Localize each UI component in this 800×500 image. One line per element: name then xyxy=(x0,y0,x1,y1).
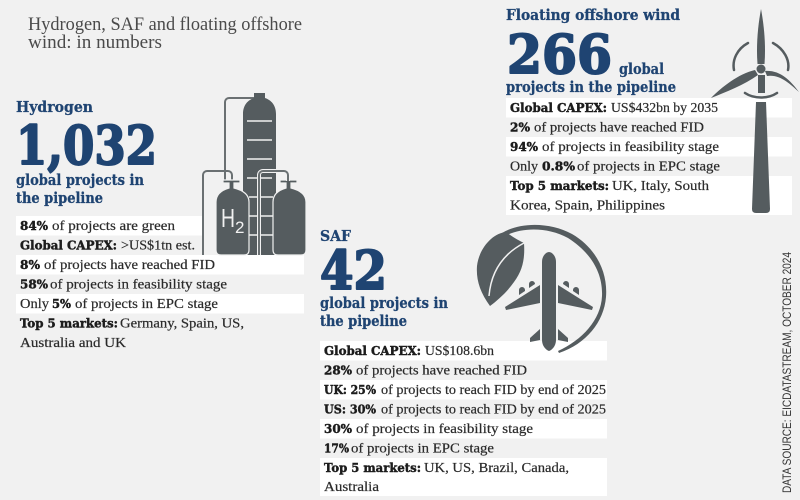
hydrogen subheading: the pipeline xyxy=(16,189,103,207)
SAF stat rows: UK: 25% xyxy=(324,383,377,397)
SAF stat rows: 28% xyxy=(324,364,353,378)
hydrogen stat rows: Global CAPEX: xyxy=(20,238,117,252)
hydrogen stat rows: 84% xyxy=(20,219,49,233)
wind big number: 266 xyxy=(507,24,612,86)
hydrogen stat rows: 5% xyxy=(52,297,72,311)
SAF stat rows: of projects in EPC stage xyxy=(351,440,494,456)
SAF subheading: global projects in xyxy=(320,294,448,312)
wind stat rows: 0.8% xyxy=(542,160,576,174)
hydrogen subheading xyxy=(16,171,144,207)
panel: hydrogen xyxy=(16,93,306,350)
hydrogen stat rows: Only xyxy=(20,296,49,311)
hydrogen stat rows: >US$1tn est. xyxy=(121,238,195,252)
hydrogen stat rows: of projects in EPC stage xyxy=(75,296,218,311)
SAF subheading: the pipeline xyxy=(320,312,407,330)
hydrogen big number: 1,032 xyxy=(16,115,157,177)
wind stat rows: UK, Italy, South xyxy=(612,178,709,193)
SAF subheading xyxy=(320,294,448,330)
wind subheading: projects in the pipeline xyxy=(506,78,676,96)
wind stat rows: US$432bn by 2035 xyxy=(611,100,718,115)
hydrogen stat rows: of projects are green xyxy=(52,218,175,233)
hydrogen subheading: global projects in xyxy=(16,171,144,189)
SAF stat rows: UK, US, Brazil, Canada, xyxy=(424,460,569,475)
SAF stat rows xyxy=(320,341,607,496)
wind subheading xyxy=(506,60,676,96)
wind stat rows: Global CAPEX: xyxy=(510,101,607,115)
SAF stat rows: 30% xyxy=(324,422,353,436)
wind stat rows: 94% xyxy=(510,140,539,154)
wind heading: Floating offshore wind xyxy=(506,6,680,24)
panel: floating offshore wind xyxy=(506,6,799,215)
SAF stat rows: of projects in feasibility stage xyxy=(356,421,533,436)
wind stat rows: Only xyxy=(510,158,538,174)
wind stat rows xyxy=(506,98,792,215)
hydrogen stat rows: 8% xyxy=(20,258,41,272)
wind stat rows: of projects in feasibility stage xyxy=(542,139,719,154)
wind stat rows: Korea, Spain, Philippines xyxy=(510,198,665,212)
SAF stat rows: US: 30% xyxy=(324,402,377,416)
icon: hydrogen plant: 2 xyxy=(235,218,244,237)
SAF stat rows: of projects to reach FID by end of 2025 xyxy=(381,382,606,397)
title: wind: in numbers xyxy=(28,33,162,53)
wind stat rows: Top 5 markets: xyxy=(510,179,609,193)
hydrogen stat rows: Australia and UK xyxy=(20,335,126,350)
SAF stat rows: of projects have reached FID xyxy=(356,362,527,378)
icon: plane with leaf xyxy=(477,225,606,353)
panel: SAF xyxy=(320,225,607,496)
SAF stat rows: of projects to reach FID by end of 2025 xyxy=(381,402,606,416)
hydrogen stat rows: of projects have reached FID xyxy=(44,257,215,272)
wind stat rows: of projects in EPC stage xyxy=(577,158,720,174)
data source note: DATA SOURCE: EICDATASTREAM, OCTOBER 2024 xyxy=(782,251,794,493)
wind stat rows: 2% xyxy=(510,120,531,134)
wind stat rows: of projects have reached FID xyxy=(534,120,704,134)
hydrogen stat rows: Top 5 markets: xyxy=(20,316,118,330)
icon: wind turbine xyxy=(711,9,799,213)
icon: hydrogen plant: H xyxy=(221,203,235,233)
title: Hydrogen, SAF and floating offshore xyxy=(28,15,302,35)
SAF stat rows: 17% xyxy=(324,442,350,456)
SAF stat rows: Australia xyxy=(324,479,379,494)
SAF heading: SAF xyxy=(320,227,351,245)
wind subheading: global xyxy=(619,60,664,78)
hydrogen heading: Hydrogen xyxy=(16,98,93,116)
SAF big number: 42 xyxy=(320,240,387,302)
title xyxy=(28,15,302,53)
hydrogen stat rows: of projects in feasibility stage xyxy=(50,276,227,292)
hydrogen stat rows xyxy=(16,216,304,350)
SAF stat rows: Top 5 markets: xyxy=(324,461,421,475)
SAF stat rows: US$108.6bn xyxy=(425,343,494,358)
icon: hydrogen plant xyxy=(203,93,306,255)
SAF stat rows: Global CAPEX: xyxy=(324,344,421,358)
hydrogen stat rows: Germany, Spain, US, xyxy=(120,316,244,330)
hydrogen stat rows: 58% xyxy=(20,278,49,292)
